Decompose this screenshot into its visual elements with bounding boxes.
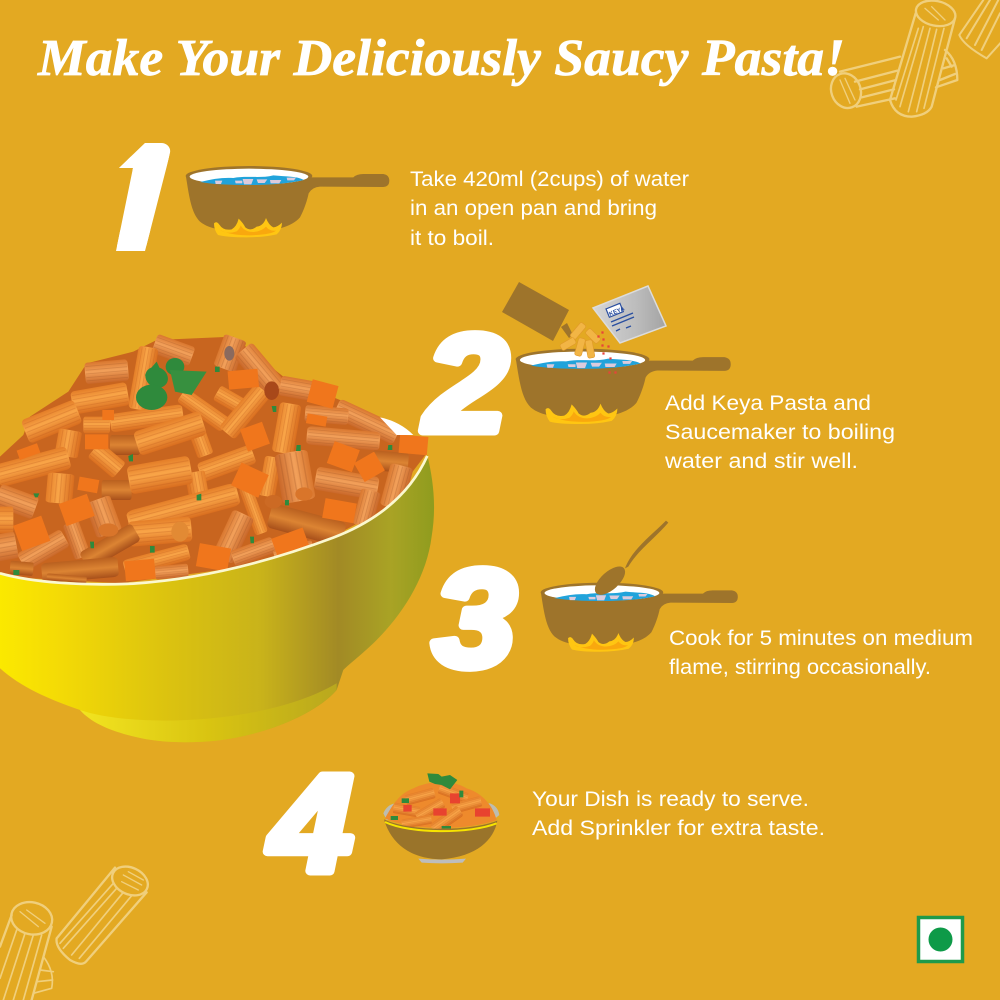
- bowl foot: [80, 683, 337, 742]
- carrot pieces: [13, 369, 428, 581]
- parsley garnish: [13, 358, 392, 575]
- icon: saucemaker sachet: [593, 286, 666, 343]
- step 4 text: Add Sprinkler for extra taste.: [532, 816, 825, 840]
- step 2 text: Saucemaker to boiling: [665, 420, 895, 444]
- step 1 text: it to boil.: [410, 226, 494, 250]
- step 1 text: [410, 167, 689, 250]
- step 3 text: [669, 626, 973, 679]
- big pasta bowl illustration: [0, 334, 434, 742]
- step 2 pan: [516, 349, 731, 424]
- icon: served pasta bowl: [383, 773, 499, 863]
- step 1 text: Take 420ml (2cups) of water: [410, 167, 689, 191]
- decoration: pasta outlines top right: [826, 0, 1000, 117]
- icon: falling pasta and spices: [559, 322, 616, 373]
- bowl body: [0, 455, 434, 742]
- pasta pile: [0, 334, 427, 583]
- icon: saucemaker sachet: KEYA: [608, 306, 626, 318]
- step 3 text: Cook for 5 minutes on medium: [669, 626, 973, 650]
- bowl rim highlight: [0, 456, 427, 584]
- bowl back rim: [380, 417, 413, 435]
- step 4 text: [532, 787, 825, 840]
- step 1 text: in an open pan and bring: [410, 196, 657, 220]
- step 3 number: 3: [433, 542, 516, 696]
- title: Make Your Deliciously Saucy Pasta!: [37, 30, 845, 87]
- decoration: pasta outlines bottom left: [0, 861, 153, 1000]
- icon: vegetarian mark: [918, 918, 962, 962]
- step 3 pan: [541, 583, 738, 652]
- step 2 number: 2: [422, 307, 508, 461]
- icon: pasta box: [502, 282, 569, 341]
- step 2 text: [664, 391, 895, 473]
- step 3 text: flame, stirring occasionally.: [669, 655, 931, 679]
- step 4 text: Your Dish is ready to serve.: [532, 787, 809, 811]
- icon: spoon: [590, 521, 668, 600]
- step 4 number: 4: [267, 747, 353, 901]
- step 1 number: 1: [92, 121, 176, 275]
- step 2 text: Add Keya Pasta and: [665, 391, 871, 415]
- step 2 text: water and stir well.: [664, 449, 858, 473]
- step 1 pan: [186, 166, 389, 237]
